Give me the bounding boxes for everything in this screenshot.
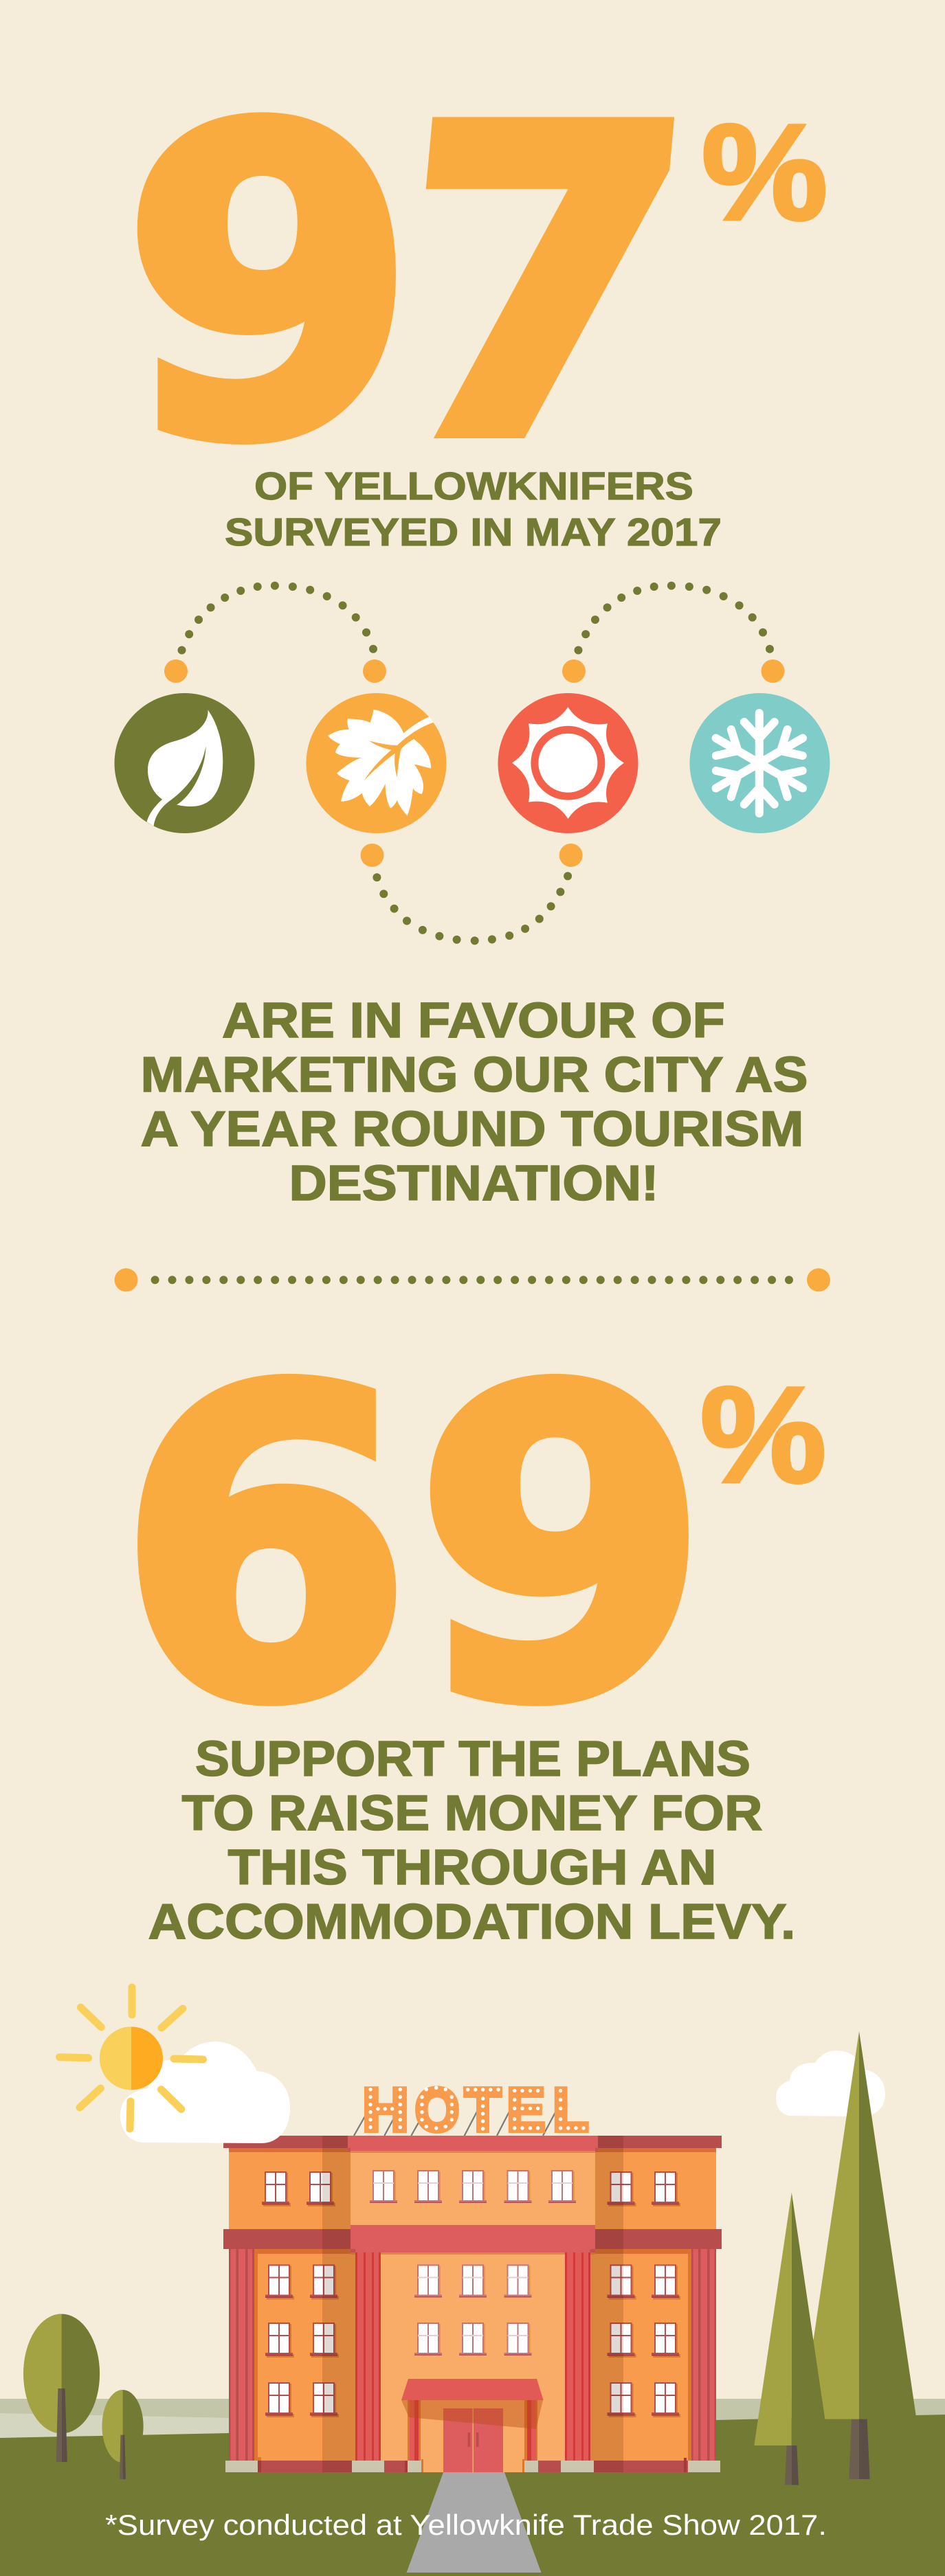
footnote: *Survey conducted at Yellowknife Trade Show 2017. [105, 2509, 827, 2541]
icon: autumn maple leaf [307, 693, 447, 833]
icon: summer sun [498, 693, 638, 833]
centre block [348, 2136, 598, 2472]
stat: 69 percent: % [700, 1359, 826, 1511]
windows: right wing [608, 2172, 680, 2417]
heading: support accommodation levy [148, 1732, 796, 1950]
hotel sign: O [415, 2076, 459, 2143]
tree: small round [102, 2390, 144, 2479]
hotel building [223, 2136, 722, 2472]
canopy shadow [401, 2400, 543, 2429]
heading: in favour of marketing: ARE IN FAVOUR OF [222, 993, 725, 1048]
stat: 97 percent: 7 [374, 41, 708, 532]
heading: in favour of marketing [140, 993, 808, 1211]
base plinth [225, 2457, 720, 2472]
landscape: hills and ground [0, 2399, 945, 2576]
windows: centre block [370, 2171, 576, 2355]
stat: 69 percent: 9 [415, 1302, 709, 1793]
tree: short pine [754, 2193, 829, 2485]
icon: winter snowflake [690, 693, 830, 833]
heading: in favour of marketing: DESTINATION! [289, 1156, 658, 1211]
heading: of Yellowknifers surveyed: OF YELLOWKNIFERS [254, 464, 693, 508]
heading: support accommodation levy: THIS THROUGH AN [228, 1840, 716, 1895]
hotel sign: L [553, 2076, 588, 2143]
hotel sign [354, 2076, 588, 2143]
dotted connector: maple leaf to sun [360, 844, 583, 945]
columns [229, 2249, 716, 2461]
heading: of Yellowknifers surveyed [225, 464, 722, 554]
stat: 97 percent: 9 [122, 40, 416, 532]
heading: support accommodation levy: ACCOMMODATION LEVY. [148, 1895, 796, 1950]
heading: of Yellowknifers surveyed: SURVEYED IN MAY 2017 [225, 510, 722, 554]
dotted connector: sun to snowflake [562, 582, 785, 683]
dotted divider [114, 1268, 830, 1291]
windows: left wing [262, 2172, 339, 2417]
heading: in favour of marketing: MARKETING OUR CITY AS [140, 1048, 808, 1103]
stat: 69 percent [118, 1302, 826, 1793]
tree: large round [23, 2314, 100, 2462]
heading: support accommodation levy: TO RAISE MONEY FOR [181, 1786, 763, 1841]
hotel sign: E [507, 2076, 545, 2143]
entrance columns [408, 2400, 537, 2461]
cloud: right [776, 2050, 885, 2116]
stat: 69 percent: 6 [118, 1302, 412, 1793]
icon: sun [60, 1987, 203, 2129]
entrance canopy [401, 2379, 544, 2400]
dotted connector: leaf to maple leaf [164, 582, 386, 683]
hotel sign: H [363, 2076, 408, 2143]
hotel door [443, 2408, 503, 2472]
hotel sign: T [465, 2076, 500, 2143]
left wing walls and roof [223, 2136, 357, 2462]
road [407, 2472, 542, 2573]
cloud: left [120, 2042, 290, 2143]
icon: spring leaf [114, 693, 254, 833]
stat: 97 percent: % [702, 96, 827, 248]
right wing walls and roof [588, 2136, 722, 2462]
tree: tall pine [801, 2031, 917, 2479]
heading: in favour of marketing: A YEAR ROUND TOURISM [140, 1102, 804, 1157]
heading: support accommodation levy: SUPPORT THE PLANS [195, 1732, 751, 1787]
wing shadows [322, 2136, 623, 2472]
stat: 97 percent [122, 40, 827, 532]
